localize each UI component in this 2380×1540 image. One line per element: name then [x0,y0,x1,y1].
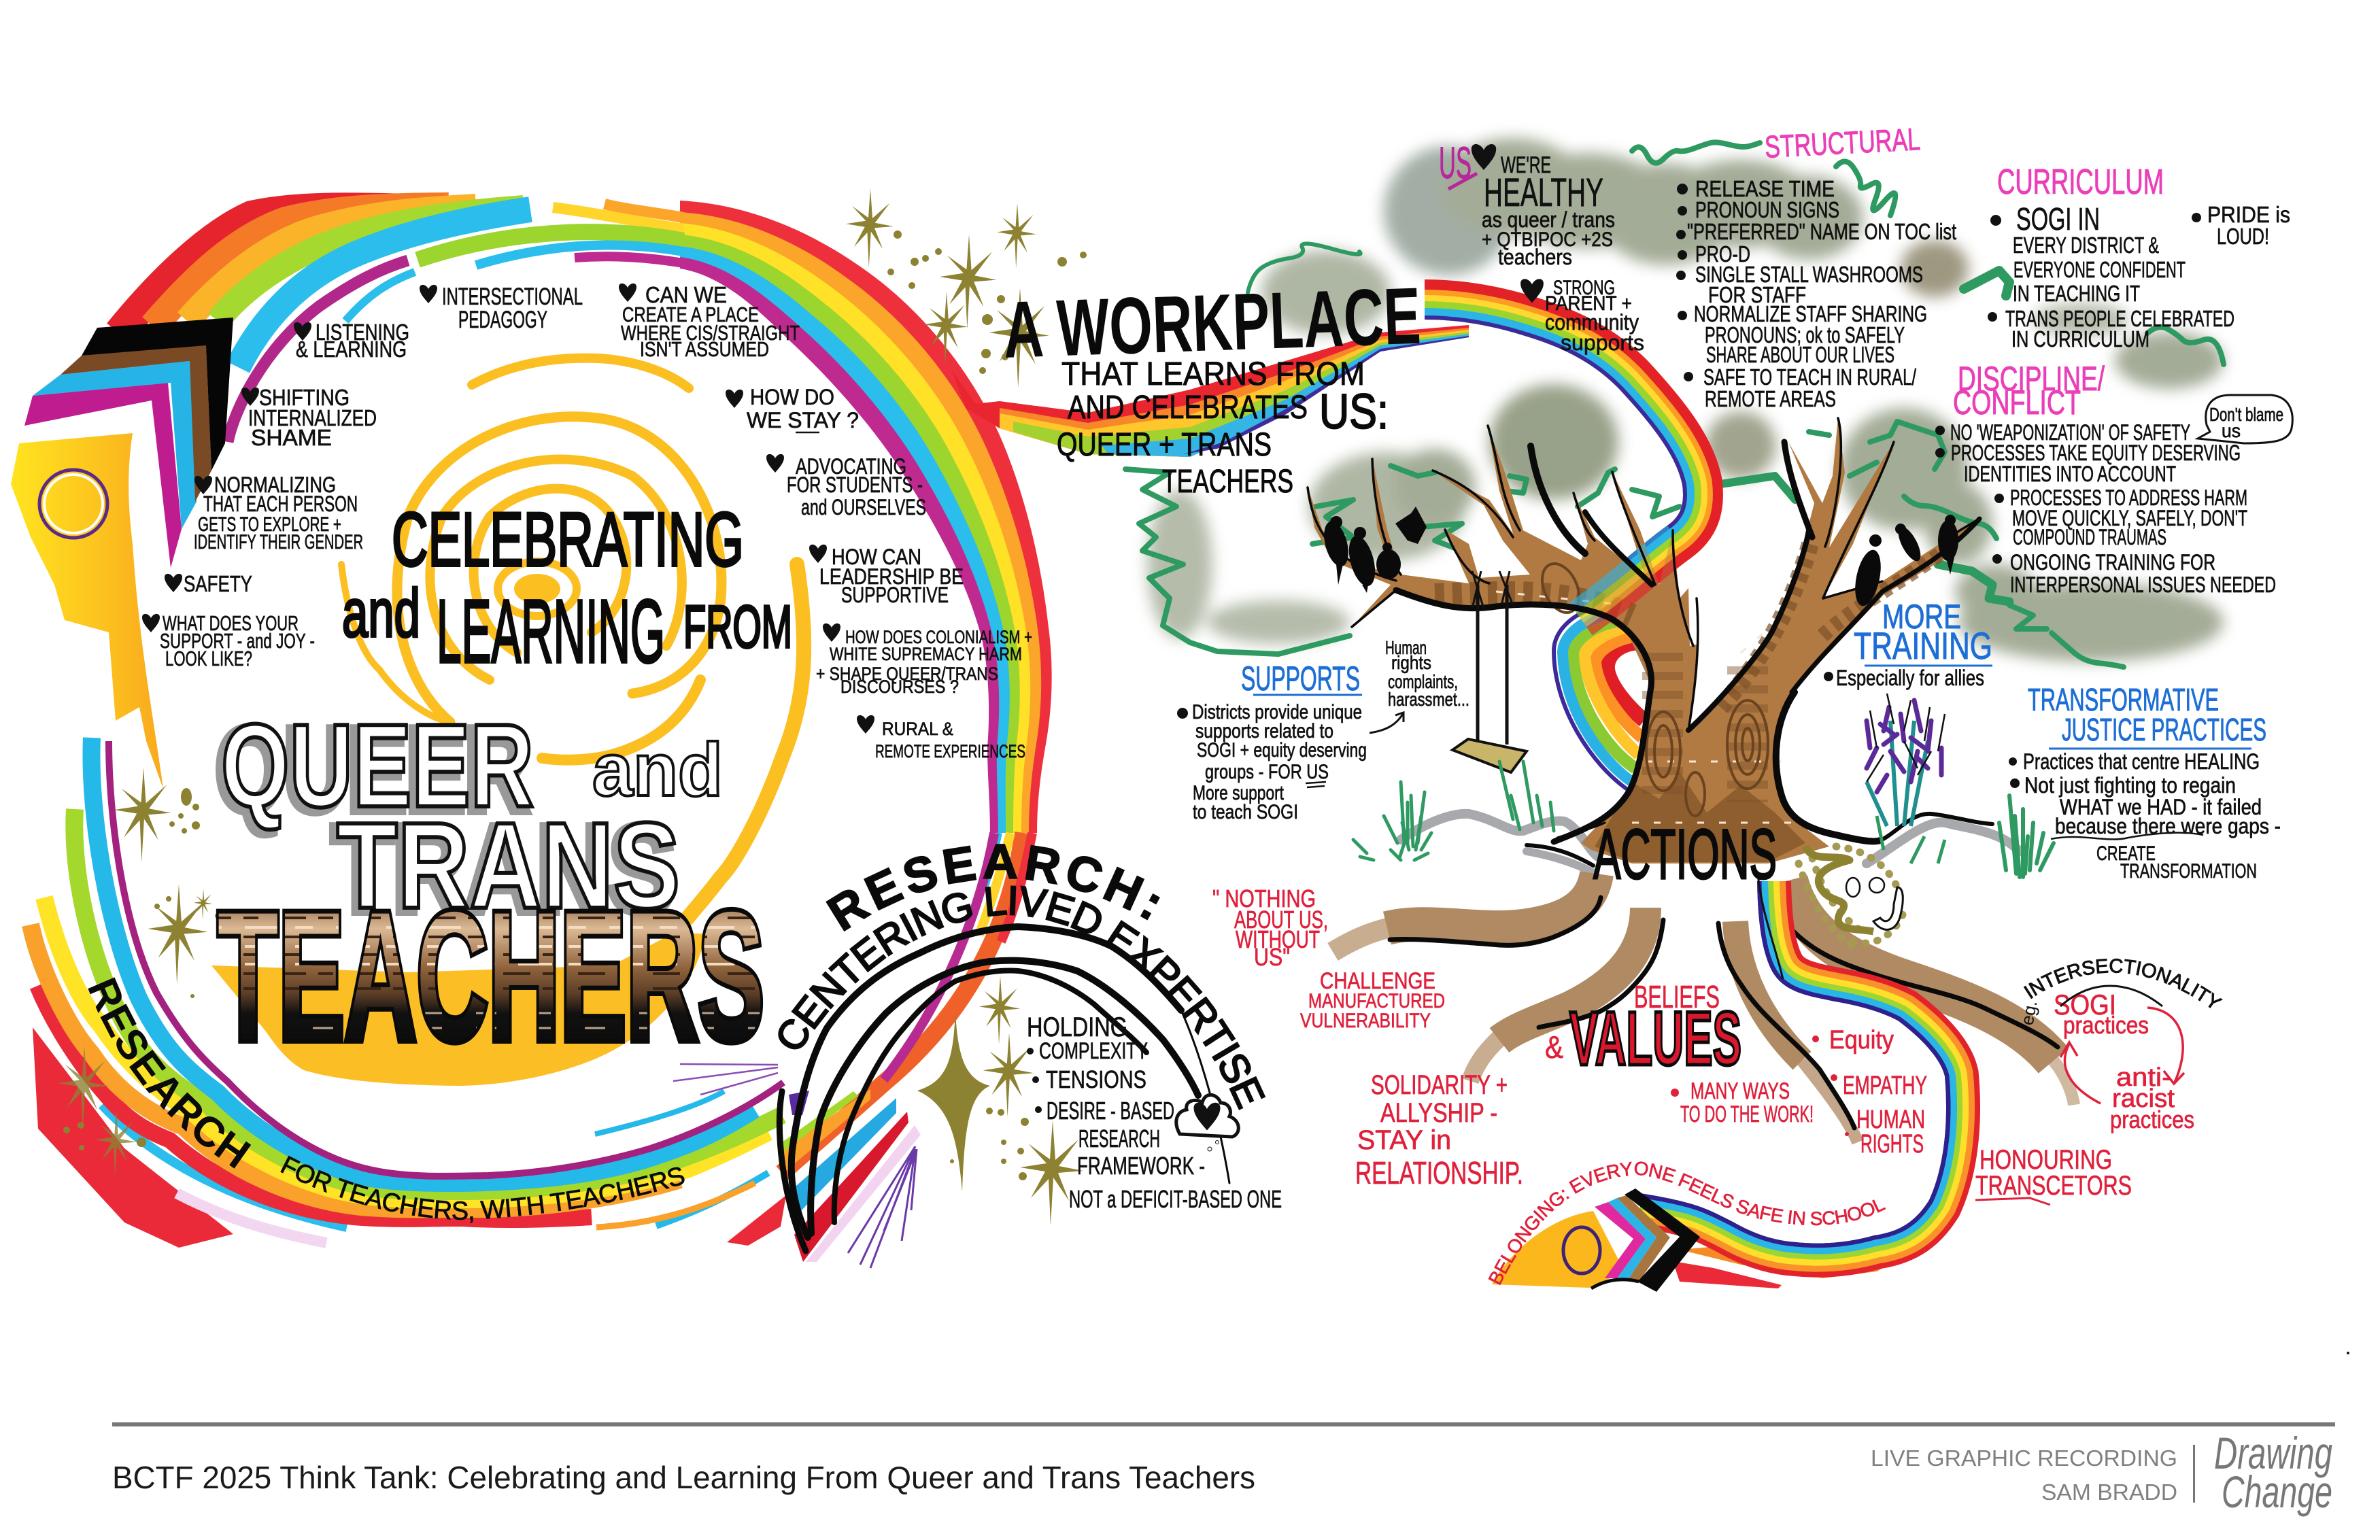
note: shifting: SHAME [251,425,332,450]
roots [1333,874,2074,1142]
icon: worms and soil [1758,846,1904,979]
heading: a workplace that learns: THAT LEARNS FROM [1061,356,1365,392]
note: leadership: LEADERSHIP BE [819,564,964,589]
icon: heart cloud [1176,1095,1238,1151]
title: actions: ACTIONS [1593,815,1777,894]
list: structural: PRONOUN SIGNS [1695,197,1839,222]
list: transformative justice: Practices that centre HEALING [2023,749,2260,774]
note: challenge vulnerability: VULNERABILITY [1300,1010,1431,1032]
heading: a workplace that learns: AND CELEBRATES [1068,390,1308,426]
trunk knots [1535,558,1768,816]
note: human rights complaints: rights [1391,652,1431,673]
rainbow: lower tail [782,833,1032,1173]
icon: lavender flower [1867,694,1945,863]
list: supports: More support [1193,782,1285,804]
note: normalizing: GETS TO EXPLORE + [198,513,341,536]
note: strong parent and community: PARENT + [1545,292,1632,315]
note: solidarity: SOLIDARITY + [1371,1070,1508,1100]
note: normalizing: NORMALIZING [214,473,336,497]
note: listening: & LEARNING [296,337,407,362]
note: can we create a place: CAN WE [645,282,727,307]
note: especially for allies: Especially for allies [1836,666,1984,690]
heading: transformative justice [2028,682,2266,749]
note: normalizing: IDENTIFY THEIR GENDER [194,531,363,553]
footer logo: drawing change [2193,1428,2332,1517]
list: values [1812,1026,1927,1159]
title: celebrating and learning from: CELEBRATING [392,497,744,582]
note: strong parent and community: community [1545,310,1639,335]
note: sogi and anti-racist practices: practices [2063,1011,2149,1039]
list: structural: SAFE TO TEACH IN RURAL/ [1703,364,1917,390]
icon: purple ring [39,470,107,538]
list: discipline: PROCESSES TO ADDRESS HARM [2010,485,2247,510]
note: sogi and anti-racist practices: anti- [2116,1063,2171,1092]
list: transformative justice: Not just fighting to regain [2024,773,2236,798]
label: US: US [1439,137,1472,188]
notes: left side hearts [142,282,1032,762]
list: curriculum: LOUD! [2217,224,2269,249]
list: discipline [1935,420,2276,597]
trunk outlines [1308,418,1992,866]
panel: left rainbow circle [11,192,1052,1269]
list: curriculum: IN TEACHING IT [2013,281,2140,306]
list: supports: Districts provide unique [1192,701,1362,723]
heading: research: RESEARCH: [826,844,1160,931]
note: rural: RURAL & [882,719,953,739]
note: colonialism: HOW DOES COLONIALISM + [845,627,1032,647]
list: supports: to teach SOGI [1193,801,1298,823]
note: how do we stay: HOW DO [750,385,834,409]
note: what does your support: WHAT DOES YOUR [163,611,299,635]
note: how do we stay [726,385,859,432]
text: holding complexity: TENSIONS [1046,1065,1146,1093]
title: celebrating and learning from: and [342,575,420,651]
note: human rights complaints: Human [1385,637,1427,658]
quote: nothing about us: ABOUT US, [1234,906,1328,934]
note: colonialism: WHITE SUPREMACY HARM [830,644,1022,664]
note: advocating: ADVOCATING [796,454,906,479]
heading: beliefs and values: VALUES [1569,996,1741,1081]
note: sogi and anti-racist practices: practices [2110,1106,2194,1133]
note: advocating [766,454,926,519]
note: healthy: as queer / trans [1482,207,1615,232]
heading: intersectionality: eg. [2017,999,2041,1027]
list: structural: PRONOUNS; ok to SAFELY [1705,322,1905,347]
list: structural: NORMALIZE STAFF SHARING [1694,301,1927,326]
heading: a workplace that learns: A WORKPLACE [1002,271,1423,375]
heading: transformative justice: TRANSFORMATIVE [2028,682,2219,717]
label: US [1439,137,1477,189]
note: can we create a place [619,282,800,361]
flag: root progress pride [1492,1188,1700,1292]
callout: don't blame us: Don't blame [2209,404,2283,425]
note: safety: SAFETY [184,571,252,596]
panel: gold sparkles top [846,189,1087,388]
note: sogi and anti-racist practices: racist [2112,1084,2175,1113]
note: shifting [241,385,377,450]
text: holding complexity: FRAMEWORK - [1077,1152,1205,1180]
note: rural: REMOTE EXPERIENCES [875,741,1025,762]
list: discipline: COMPOUND TRAUMAS [2013,525,2166,549]
quote: nothing about us: US" [1254,943,1290,971]
rainbow: root [1640,881,1946,1288]
footer rule [112,1422,2335,1426]
rainbow: bottom right pieces [782,1089,921,1268]
list: curriculum [1988,201,2290,352]
arrow: complaints [1370,713,1404,733]
list: curriculum: IN CURRICULUM [2011,326,2149,352]
note: shifting: SHIFTING [259,385,350,410]
bark shading [1435,544,1945,862]
heading: transformative justice: JUSTICE PRACTICES [2062,712,2266,747]
note: what does your support: LOOK LIKE? [165,647,252,670]
note: honouring transcestors [1975,1145,2132,1205]
note: challenge vulnerability: CHALLENGE [1320,968,1435,994]
list: structural: "PREFERRED" NAME ON TOC list [1687,219,1956,244]
text: holding complexity: HOLDING [1027,1012,1127,1042]
heading: discipline conflict: DISCIPLINE/ [1958,360,2105,398]
note: normalizing: THAT EACH PERSON [203,492,358,516]
ground shadow [1401,814,2020,874]
banner: belonging: BELONGING: EVERYONE FEELS SAFE IN SCHOOL [1488,1161,1886,1285]
heading: more training: TRAINING [1854,624,1992,667]
heading: supports: SUPPORTS [1241,660,1360,698]
heading: beliefs and values: BELIEFS [1634,979,1720,1014]
list: transformative justice: WHAT we HAD - it failed [2060,795,2262,819]
footer credit [1871,1445,2177,1505]
title: celebrating and learning from: FROM [683,593,792,660]
speck [2347,1352,2349,1354]
note: intersectional pedagogy [420,284,583,333]
title: queer and trans [216,699,723,938]
icon: gold stars [917,976,1083,1226]
note: solidarity: STAY in [1357,1125,1451,1155]
text: holding complexity: NOT a DEFICIT-BASED ONE [1069,1185,1282,1213]
note: what does your support [142,611,315,670]
list: curriculum: PRIDE is [2207,202,2290,227]
title: teachers: TEACHERS [218,874,764,1078]
heading: structural: STRUCTURAL [1764,121,1921,165]
rainbow crossing trunk [1569,526,1667,602]
list: supports: supports related to [1195,720,1333,742]
note: strong parent and community: STRONG [1553,277,1615,299]
note: colonialism: + SHAPE QUEER/TRANS [816,664,998,684]
spiral: yellow centre [211,358,804,1086]
list: transformative justice: TRANSFORMATION [2120,860,2257,883]
list: values: HUMAN [1856,1106,1925,1134]
list: structural: SHARE ABOUT OUR LIVES [1706,342,1894,367]
panel: research centering lived expertise [777,844,1282,1254]
panel: beliefs and values red text [1212,885,2194,1285]
list: structural: PRO-D [1695,241,1750,267]
note: healthy: teachers [1498,245,1572,269]
list: values: EMPATHY [1843,1072,1927,1100]
rainbow: wave to workplace [952,325,1469,457]
banner text: research for teachers: FOR TEACHERS, WITH TEACHERS [280,1156,685,1223]
text: holding complexity: RESEARCH [1078,1125,1160,1152]
footer logo: drawing change: Change [2222,1467,2332,1517]
note: can we create a place: CREATE A PLACE [622,303,759,326]
quote: nothing about us: WITHOUT [1236,925,1320,953]
note: advocating: FOR STUDENTS - [787,473,923,497]
grass [1353,762,2054,877]
note: many ways: MANY WAYS [1690,1078,1790,1104]
note: rural [857,715,1025,762]
list: discipline: PROCESSES TAKE EQUITY DESERVING [1951,441,2241,465]
rainbow: upper right band [418,201,1052,833]
heading: a workplace that learns: US: [1319,385,1389,439]
note: challenge vulnerability: MANUFACTURED [1308,990,1445,1012]
note: human rights complaints: complaints, [1388,671,1458,692]
list: discipline: NO 'WEAPONIZATION' OF SAFETY [1950,420,2190,445]
note: intersectional pedagogy: PEDAGOGY [458,307,547,333]
list: discipline: IDENTITIES INTO ACCOUNT [1964,462,2176,486]
heading: centering lived expertise: CENTERING LIVED EXPERTISE [778,885,1266,1110]
note: solidarity: ALLYSHIP - [1380,1098,1497,1128]
rainbow: lower arc behind trunk [1554,600,1644,791]
note: honouring transcestors: TRANSCETORS [1975,1171,2132,1201]
note: listening: LISTENING [316,320,409,345]
text: holding complexity [1027,1012,1282,1213]
panel: green leaf scribbles [1125,142,2224,667]
heading: beliefs and values [1545,979,1741,1081]
heading: a workplace that learns: QUEER + TRANS [1057,427,1272,463]
footer title: BCTF 2025 Think Tank: Celebrating and Learning From Queer and Trans Teachers [112,1460,1255,1495]
note: strong parent and community: supports [1561,330,1644,355]
heading: discipline conflict [1953,360,2105,422]
rainbow: upper left band [119,207,530,442]
list: values: Equity [1829,1026,1894,1055]
list: curriculum: EVERY DISTRICT & [2013,233,2159,258]
title: queer and trans: TRANS [337,798,680,934]
note: leadership: HOW CAN [832,545,921,569]
list: transformative justice: because there were gaps - [2055,814,2281,838]
list: values: RIGHTS [1860,1130,1924,1159]
rainbow: tree upper strand [1425,320,1683,602]
note: leadership: SUPPORTIVE [841,583,949,607]
note: human rights complaints [1385,637,1469,710]
callout: don't blame us [2198,395,2292,443]
list: curriculum: SOGI IN [2016,201,2100,237]
note: strong parent and community [1520,277,1644,355]
callout: don't blame us: us [2222,420,2241,441]
note: colonialism: DISCOURSES ? [840,677,959,697]
note: normalizing [194,473,363,553]
note: solidarity [1355,1070,1523,1191]
list: structural: RELEASE TIME [1695,176,1835,201]
heading: more training [1854,598,1992,667]
note: honouring transcestors: HONOURING [1979,1145,2112,1175]
note: safety [165,571,252,596]
list: supports: groups - FOR US [1205,761,1329,783]
banner text: research for teachers [88,977,685,1223]
note: healthy: WE'RE [1501,152,1551,178]
note: colonialism [816,623,1032,697]
chevrons: progress pride [24,318,233,568]
note: can we create a place: ISN'T ASSUMED [640,337,769,361]
list: curriculum: EVERYONE CONFIDENT [2013,257,2186,282]
arrows: cycle [2060,1008,2184,1103]
note: shifting: INTERNALIZED [248,405,377,430]
list: curriculum: TRANS PEOPLE CELEBRATED [2005,306,2234,331]
birds right branch [1851,515,1958,609]
footer logo: drawing change: Drawing [2214,1428,2332,1478]
title: celebrating and learning from [342,497,792,681]
rainbow: lower band [31,738,786,1248]
note: can we create a place: WHERE CIS/STRAIGHT [621,321,800,345]
quote: nothing about us: " NOTHING [1212,885,1316,912]
list: transformative justice [2009,749,2281,883]
note: intersectional pedagogy: INTERSECTIONAL [442,284,583,310]
note: healthy: HEALTHY [1484,171,1603,215]
list: discipline: MOVE QUICKLY, SAFELY, DON'T [2012,506,2247,530]
note: listening [294,320,409,362]
note: healthy: + QTBIPOC +2S [1482,228,1613,251]
title: celebrating and learning from: LEARNING [437,581,665,681]
note: how do we stay: WE STAY ? [747,408,859,432]
heading: curriculum: CURRICULUM [1997,162,2164,202]
heading: a workplace that learns [1002,271,1423,500]
heading: discipline conflict: CONFLICT [1953,383,2081,422]
list: structural: SINGLE STALL WASHROOMS [1695,262,1923,287]
footer credit: SAM BRADD [2041,1479,2177,1505]
root outlines [1390,897,2058,1128]
title: queer and trans: QUEER [221,699,534,832]
note: leadership [809,545,964,607]
heading: more training: MORE [1882,598,1961,636]
trunk and branches [1308,418,1979,863]
text: holding complexity: DESIRE - BASED [1047,1097,1174,1125]
note: solidarity: RELATIONSHIP. [1355,1155,1523,1191]
note: many ways [1671,1078,1814,1127]
list: structural: REMOTE AREAS [1705,386,1836,411]
panel: tree [1308,418,2074,1292]
arches [779,927,1229,1251]
banner text: research for teachers: RESEARCH [88,977,252,1169]
heading: beliefs and values: & [1545,1029,1563,1065]
note: challenge vulnerability [1300,968,1445,1032]
title: queer and trans: and [592,728,723,812]
heading: a workplace that learns: TEACHERS [1162,464,1293,500]
note: sogi and anti-racist practices [2054,989,2194,1133]
note: advocating: and OURSELVES [801,495,926,519]
list: transformative justice: CREATE [2096,842,2156,865]
icon: gold sparkles left [58,768,220,1178]
text: holding complexity: COMPLEXITY [1039,1038,1148,1064]
sun wash: intersex flag yellow [11,433,163,789]
note: what does your support: SUPPORT - and JOY - [160,629,315,653]
list: discipline: ONGOING TRAINING FOR [2010,550,2215,575]
list: structural [1676,176,1956,411]
note: healthy [1439,137,1615,269]
list: supports: SOGI + equity deserving [1197,739,1367,762]
title: queer and trans: QUEER [216,703,528,836]
list: supports [1177,701,1367,823]
list: discipline: INTERPERSONAL ISSUES NEEDED [2010,572,2276,597]
swing [1452,571,1527,772]
list: structural: FOR STAFF [1708,282,1806,307]
note: sogi and anti-racist practices: SOGI [2054,989,2116,1021]
birds left branch [1320,507,1427,593]
footer credit: LIVE GRAPHIC RECORDING [1871,1445,2177,1471]
note: many ways: TO DO THE WORK! [1680,1101,1814,1127]
note: human rights complaints: harassmet... [1388,689,1469,710]
heading: intersectionality: INTERSECTIONALITY [2024,959,2223,1008]
quote: nothing about us [1212,885,1328,971]
panel: foliage washes [1147,138,2224,662]
title: queer and trans: TRANS [332,801,675,938]
